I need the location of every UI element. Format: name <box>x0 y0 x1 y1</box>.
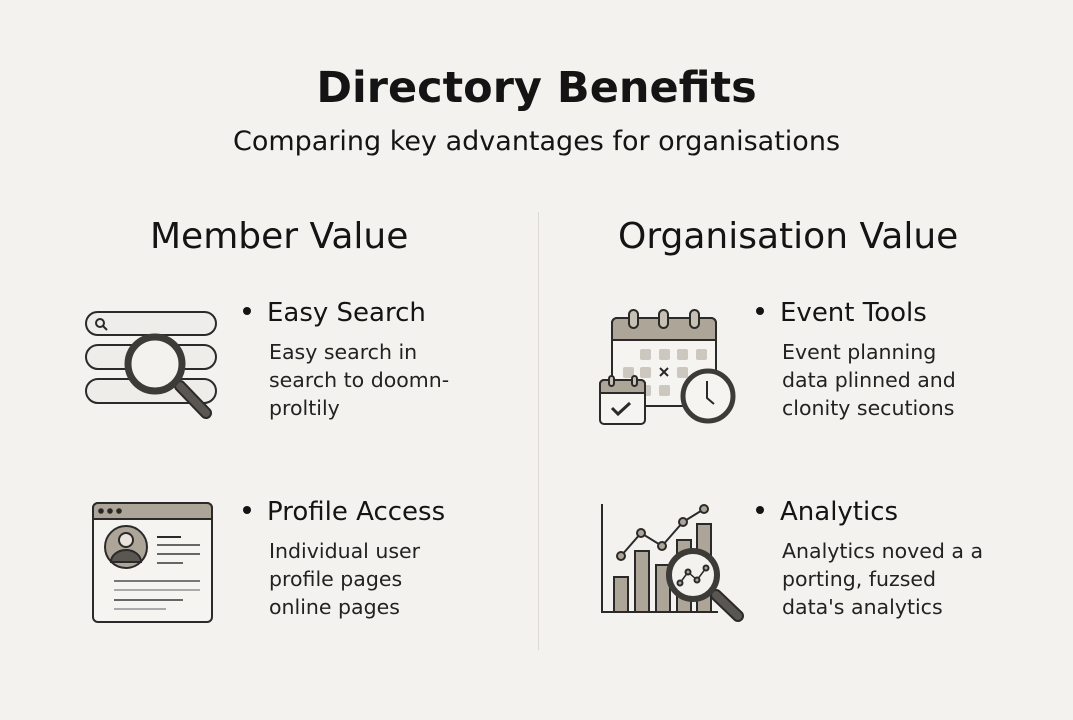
heading: Analytics <box>780 497 898 527</box>
icon: search <box>86 312 216 413</box>
divider <box>538 212 539 650</box>
text: Analytics noved a a <box>782 539 983 563</box>
text: online pages <box>269 595 400 619</box>
title: Directory Benefits <box>316 63 757 113</box>
subtitle: Comparing key advantages for organisations <box>233 126 840 157</box>
heading: member value: Member Value <box>150 216 408 257</box>
item: easy search <box>243 298 449 420</box>
text: Individual user <box>269 539 420 563</box>
text <box>269 539 420 619</box>
text: clonity secutions <box>782 396 954 420</box>
heading: organisation value: Organisation Value <box>618 216 958 257</box>
text: data's analytics <box>782 595 943 619</box>
icon: profile <box>93 503 212 622</box>
text: data plinned and <box>782 368 956 392</box>
item: event tools <box>756 298 956 420</box>
text <box>782 539 983 619</box>
item: analytics <box>756 497 983 619</box>
text: Easy search in <box>269 340 417 364</box>
text: profile pages <box>269 567 402 591</box>
text <box>269 340 449 420</box>
heading: Profile Access <box>267 497 445 527</box>
text: Event planning <box>782 340 936 364</box>
heading: Event Tools <box>780 298 927 328</box>
icon: analytics <box>602 504 738 616</box>
text <box>782 340 956 420</box>
text: search to doomn- <box>269 368 449 392</box>
icon: calendar <box>600 310 733 424</box>
text: proltily <box>269 396 340 420</box>
item: profile access <box>243 497 445 619</box>
heading: Easy Search <box>267 298 426 328</box>
text: porting, fuzsed <box>782 567 936 591</box>
